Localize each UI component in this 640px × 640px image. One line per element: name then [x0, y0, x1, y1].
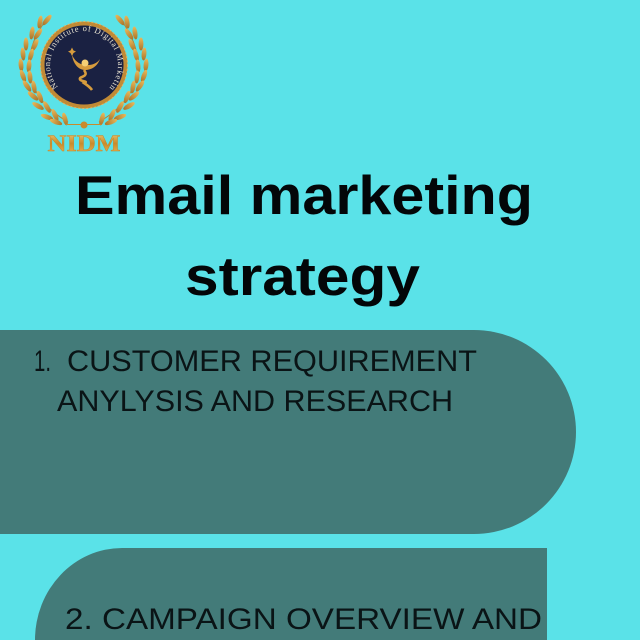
step 1 text [34, 345, 477, 418]
panel: step 2 [35, 548, 547, 640]
logo: NIDM emblem [18, 14, 148, 156]
logo wordmark: NIDM [48, 131, 121, 156]
step 1 text: ANYLYSIS AND RESEARCH [57, 385, 453, 418]
icon: right laurel branch [98, 13, 149, 126]
step 2 text: 2. CAMPAIGN OVERVIEW AND [65, 603, 542, 636]
title: Email marketing [75, 164, 533, 226]
icon: gold lamp symbol [68, 48, 100, 90]
icon: bottom clasp [66, 122, 102, 128]
step 1 text: 1. [34, 345, 51, 378]
title: strategy [185, 245, 420, 307]
icon: gold ring medallion [40, 22, 128, 108]
title [75, 164, 533, 307]
step 1 text: CUSTOMER REQUIREMENT [67, 345, 477, 378]
panel: step 1 [0, 330, 576, 534]
icon: left laurel branch [18, 13, 69, 126]
